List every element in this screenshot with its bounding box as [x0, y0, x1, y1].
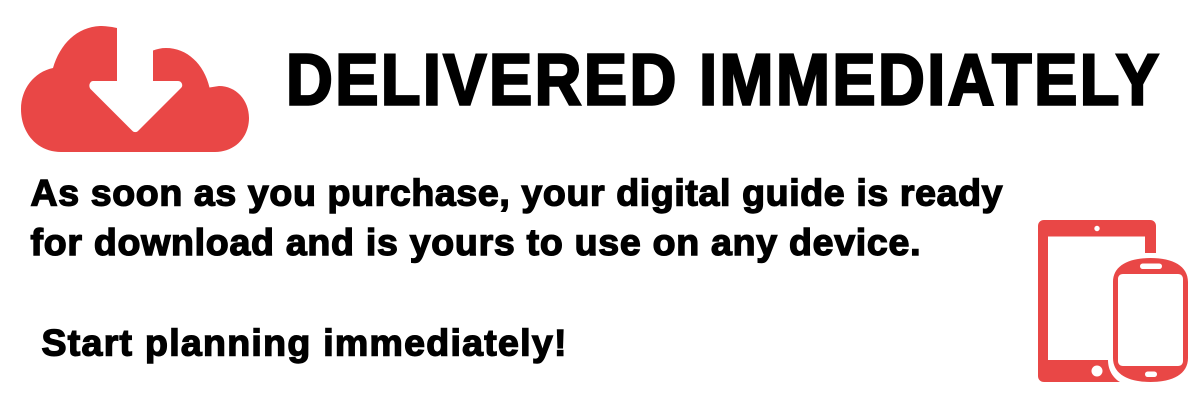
- phone speaker: [1140, 264, 1162, 269]
- title: DELIVERED IMMEDIATELY: [286, 39, 1159, 120]
- text block: call to action: Start planning immediately!: [42, 322, 566, 364]
- tablet home button: [1092, 366, 1102, 376]
- phone button: [1145, 372, 1157, 377]
- icon: cloud download: [21, 26, 249, 152]
- icon: tablet and phone: [1038, 220, 1188, 382]
- tablet camera: [1094, 226, 1100, 231]
- phone: [1113, 258, 1188, 382]
- text block: description: As soon as you purchase, your digital guide is ready: [30, 172, 1003, 214]
- tablet: [1038, 220, 1156, 382]
- text block: description: [30, 172, 1003, 263]
- text block: description: for download and is yours to use on any device.: [30, 221, 920, 263]
